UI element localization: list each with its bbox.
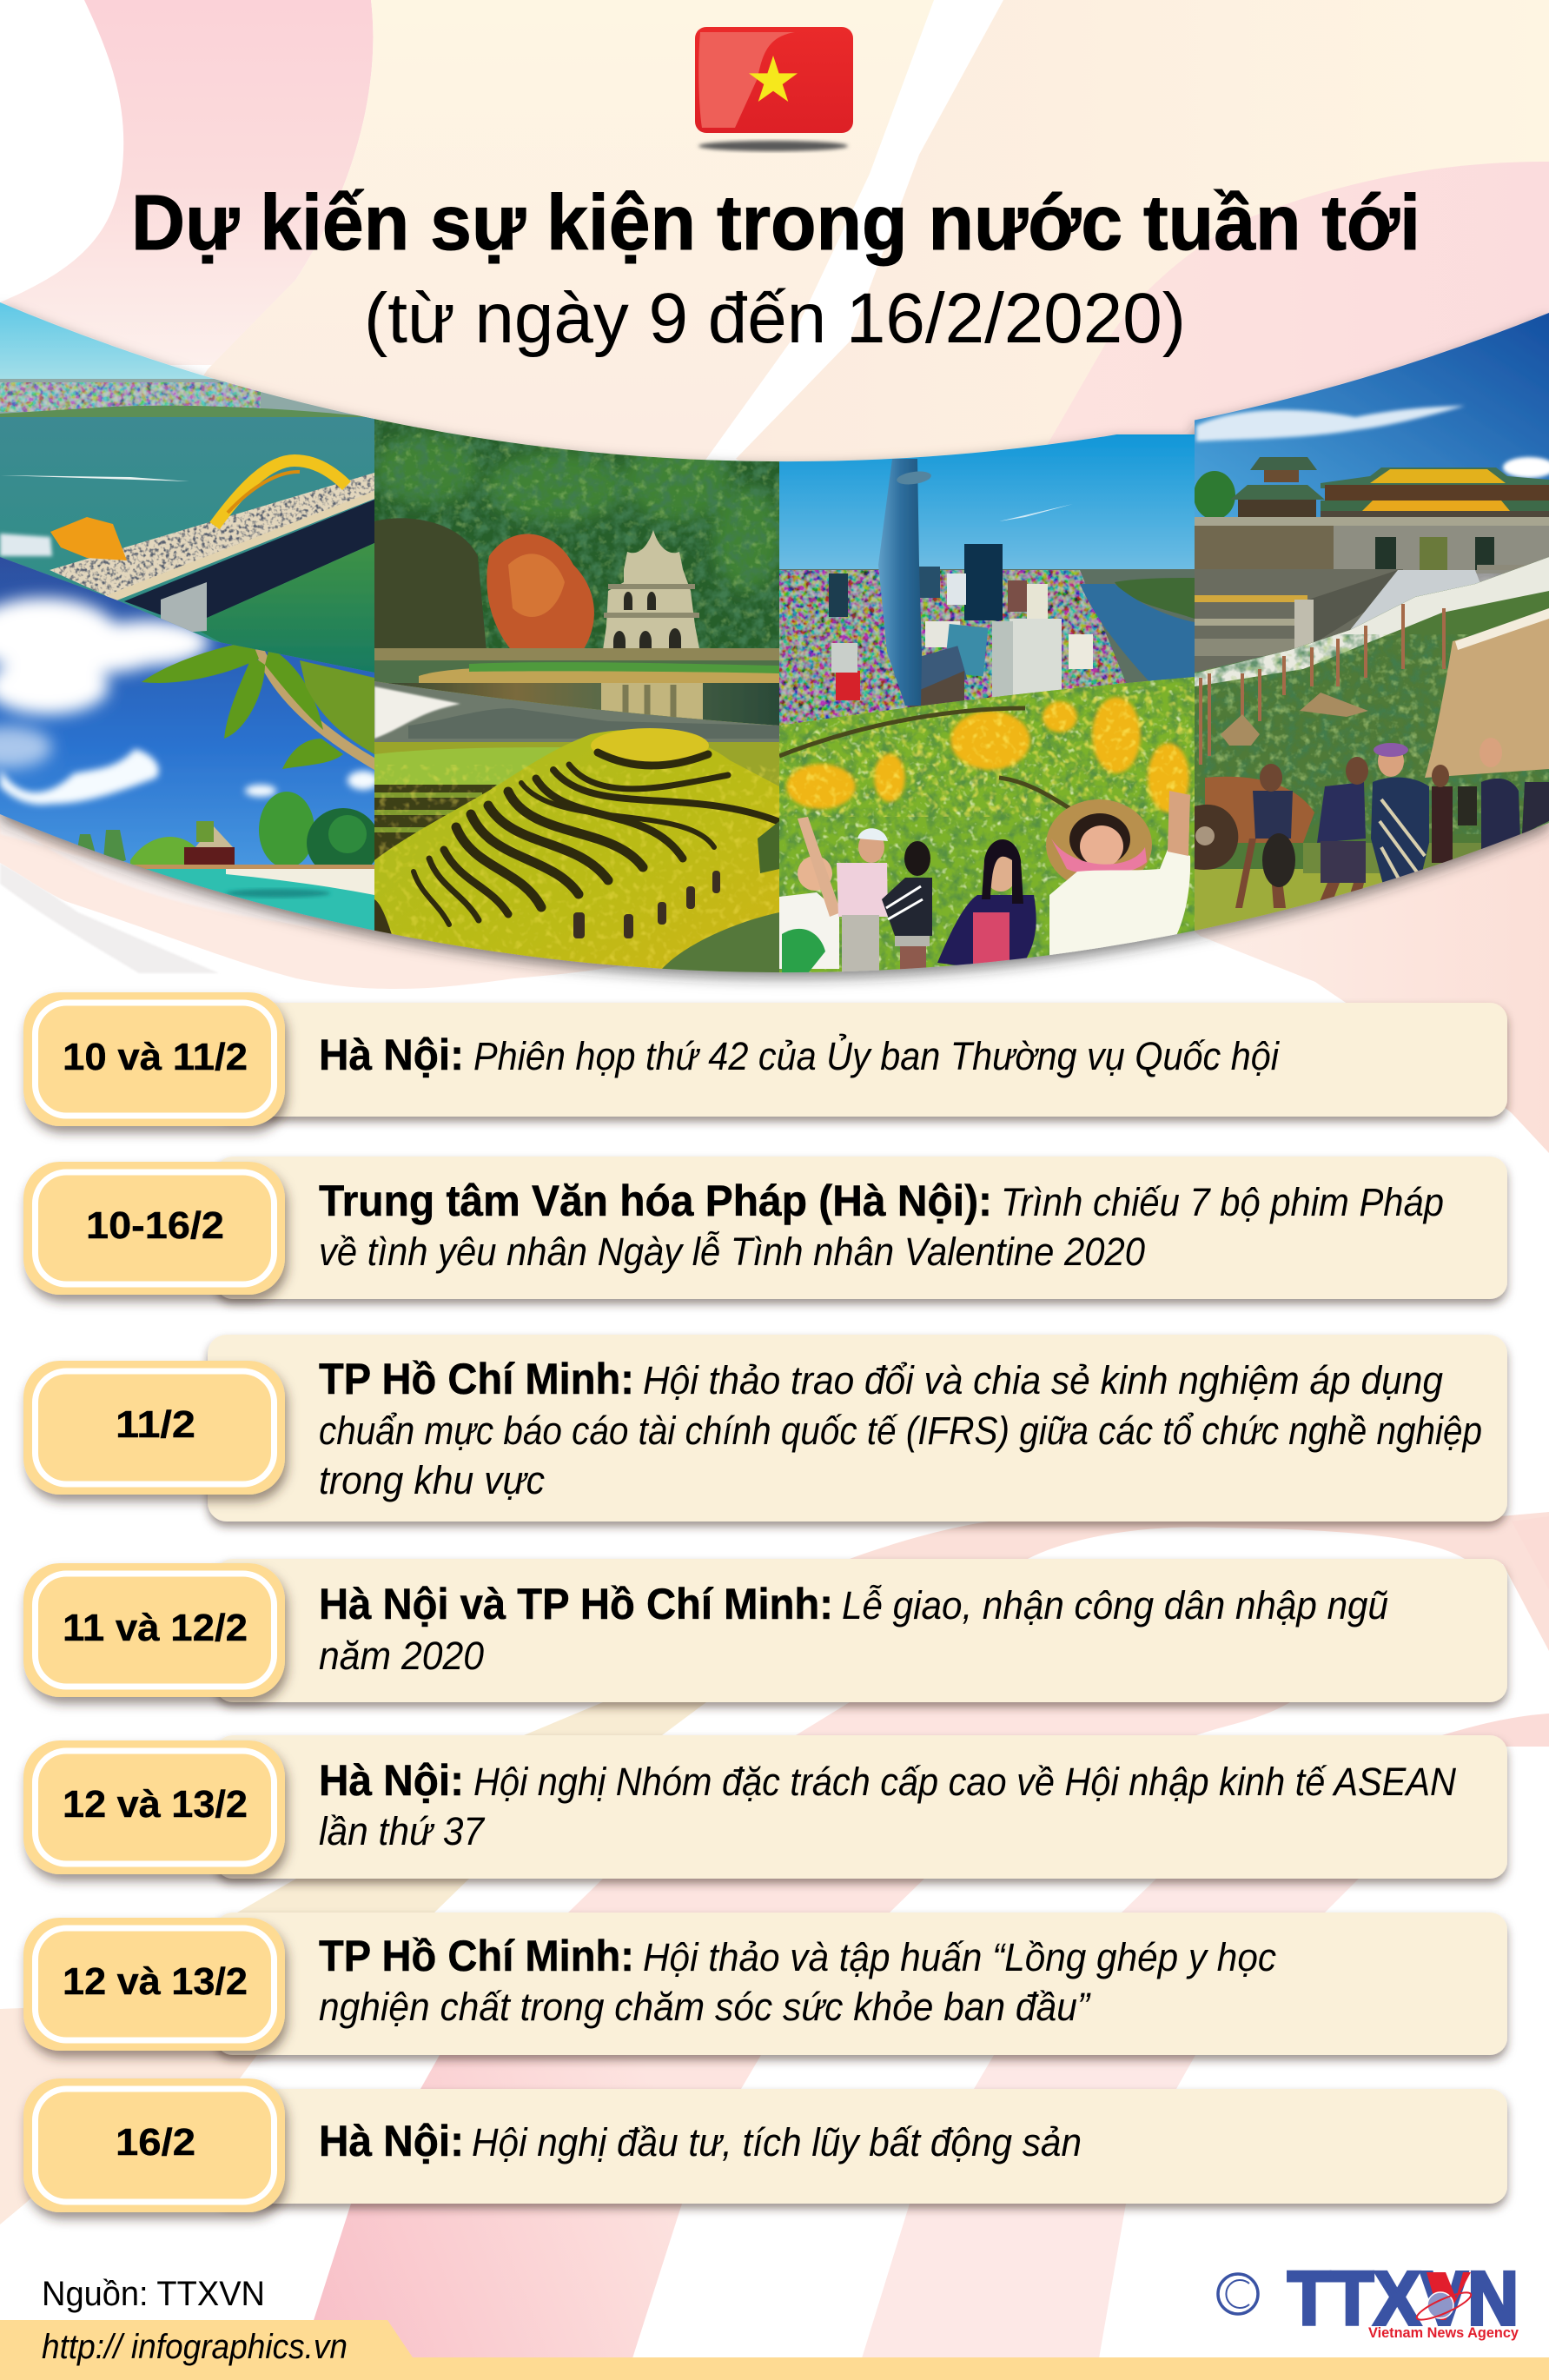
date badge: 10-16/2 [86,1204,224,1247]
event text: năm 2020 [319,1634,484,1678]
event text [319,1756,1456,1853]
event row 6 [23,1913,1507,2055]
subtitle: (từ ngày 9 đến 16/2/2020) [364,279,1186,358]
photo: Central Highlands gong dancers [1195,556,1549,956]
photo: Hoan Kiem lake and Turtle Tower [373,417,782,726]
date badge [23,992,285,1126]
title: Dự kiến sự kiện trong nước tuần tới [131,180,1420,267]
event text [319,1177,1444,1274]
event text: Hà Nội: [319,1756,464,1805]
date badge [23,2078,285,2212]
event row 2 [23,1157,1507,1299]
event text [319,1580,1388,1678]
date badge [23,1740,285,1874]
event text: nghiện chất trong chăm sóc sức khỏe ban đầu” [319,1985,1091,2029]
photo collage arc [0,261,1549,994]
event row 4 [23,1559,1507,1702]
website url: http:// infographics.vn [42,2328,348,2366]
TTXVN logo [1218,2257,1519,2341]
event text: Hà Nội: [319,2117,464,2165]
event text [319,1355,1482,1502]
event text: lần thứ 37 [319,1809,486,1853]
event text: Trình chiếu 7 bộ phim Pháp [1001,1180,1444,1224]
event text [319,1932,1276,2029]
date badge: 16/2 [116,2121,195,2164]
photo: Ho Chi Minh City skyline [779,434,1195,731]
source text: Nguồn: TTXVN [42,2275,265,2313]
event text: TP Hồ Chí Minh: [319,1932,634,1980]
event text: Hội nghị Nhóm đặc trách cấp cao về Hội nhập kinh tế ASEAN [473,1760,1456,1804]
event text: Hội thảo và tập huấn “Lồng ghép y học [643,1935,1276,1979]
date badge: 11/2 [116,1403,195,1446]
event row 3 [23,1335,1507,1521]
event row 7 [23,2078,1507,2212]
event text [319,2117,1082,2165]
agency mark: TTXVN [1288,2257,1519,2341]
event text: trong khu vực [319,1458,545,1502]
photo: rice terraces [374,681,779,994]
event text: Hà Nội và TP Hồ Chí Minh: [319,1580,833,1628]
event text: Hà Nội: [319,1031,464,1079]
date badge: 12 và 13/2 [63,1960,248,2003]
photo: tropical beach with palm [0,557,380,974]
event text: về tình yêu nhân Ngày lễ Tình nhân Valentine 2020 [319,1230,1145,1274]
date badge [23,1918,285,2051]
event text: Trung tâm Văn hóa Pháp (Hà Nội): [319,1177,992,1225]
event row 1 [23,992,1507,1126]
event text: Hội thảo trao đổi và chia sẻ kinh nghiệm áp dụng [643,1358,1443,1402]
photo: Da Nang dragon bridge [0,302,379,673]
flag shadow [698,141,848,151]
event text: Hội nghị đầu tư, tích lũy bất động sản [472,2120,1082,2165]
date badge [23,1361,285,1495]
date badge: 11 và 12/2 [63,1607,248,1649]
date badge: 12 và 13/2 [63,1783,248,1826]
date badge: 10 và 11/2 [63,1036,248,1078]
icon: copyright [1218,2274,1258,2314]
photo: Hue Imperial Citadel [1194,295,1549,678]
agency name: Vietnam News Agency [1368,2324,1519,2341]
date badge [23,1162,285,1295]
footer bar [0,2320,1549,2380]
event text: Phiên họp thứ 42 của Ủy ban Thường vụ Quốc hội [473,1034,1281,1078]
photo: golden blossom and women [779,677,1195,990]
event row 5 [23,1735,1507,1879]
event text: TP Hồ Chí Minh: [319,1355,634,1403]
date badge [23,1563,285,1697]
flag of Vietnam [695,27,853,151]
event text: Lễ giao, nhận công dân nhập ngũ [842,1583,1388,1628]
